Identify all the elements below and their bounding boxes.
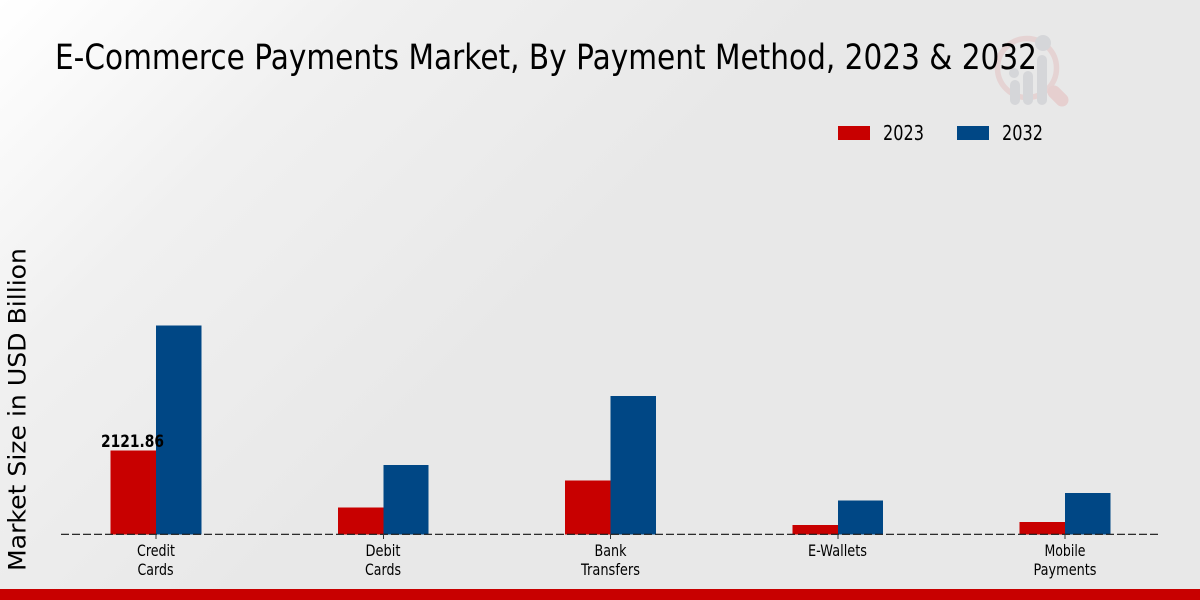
x-axis label: Debit Cards <box>365 541 401 579</box>
title: E-Commerce Payments Market, By Payment Method, 2023 & 2032 <box>55 38 1037 78</box>
x-axis label: Debit Cards: Cards <box>365 560 401 579</box>
x-axis label: Credit Cards: Credit <box>137 541 175 560</box>
x-axis label: E-Wallets: E-Wallets <box>808 541 867 560</box>
legend item: 2023 <box>838 121 924 145</box>
x-axis label: Mobile Payments: Mobile <box>1044 541 1086 560</box>
bars: E-Wallets <box>792 500 883 534</box>
x-axis label: Mobile Payments <box>1034 541 1096 579</box>
x-axis label: Bank Transfers: Transfers <box>580 560 640 579</box>
footer bar <box>0 589 1200 600</box>
bars: Debit Cards <box>338 465 428 534</box>
data label: Credit Cards 2023: 2121.86 <box>101 432 164 451</box>
bar chart <box>61 326 1159 539</box>
legend item: 2032: 2032 <box>1002 121 1043 145</box>
legend item: 2023: 2023 <box>883 121 924 145</box>
x-axis label: Mobile Payments: Payments <box>1034 560 1096 579</box>
x-axis label: Bank Transfers <box>580 541 640 579</box>
x-axis label: Bank Transfers: Bank <box>594 541 627 560</box>
bars: Bank Transfers <box>565 396 656 534</box>
bars: Mobile Payments <box>1020 493 1110 534</box>
x-axis label: Credit Cards <box>137 541 175 579</box>
x-axis label: Credit Cards: Cards <box>138 560 174 579</box>
bars: Credit Cards <box>110 326 202 534</box>
icon: watermark magnifier logo <box>998 35 1062 105</box>
x-axis label: Debit Cards: Debit <box>366 541 400 560</box>
y-axis label: Market Size in USD Billion <box>4 248 32 571</box>
legend <box>838 121 1043 145</box>
legend item: 2032 <box>957 121 1043 145</box>
x-axis baseline <box>61 533 1159 535</box>
